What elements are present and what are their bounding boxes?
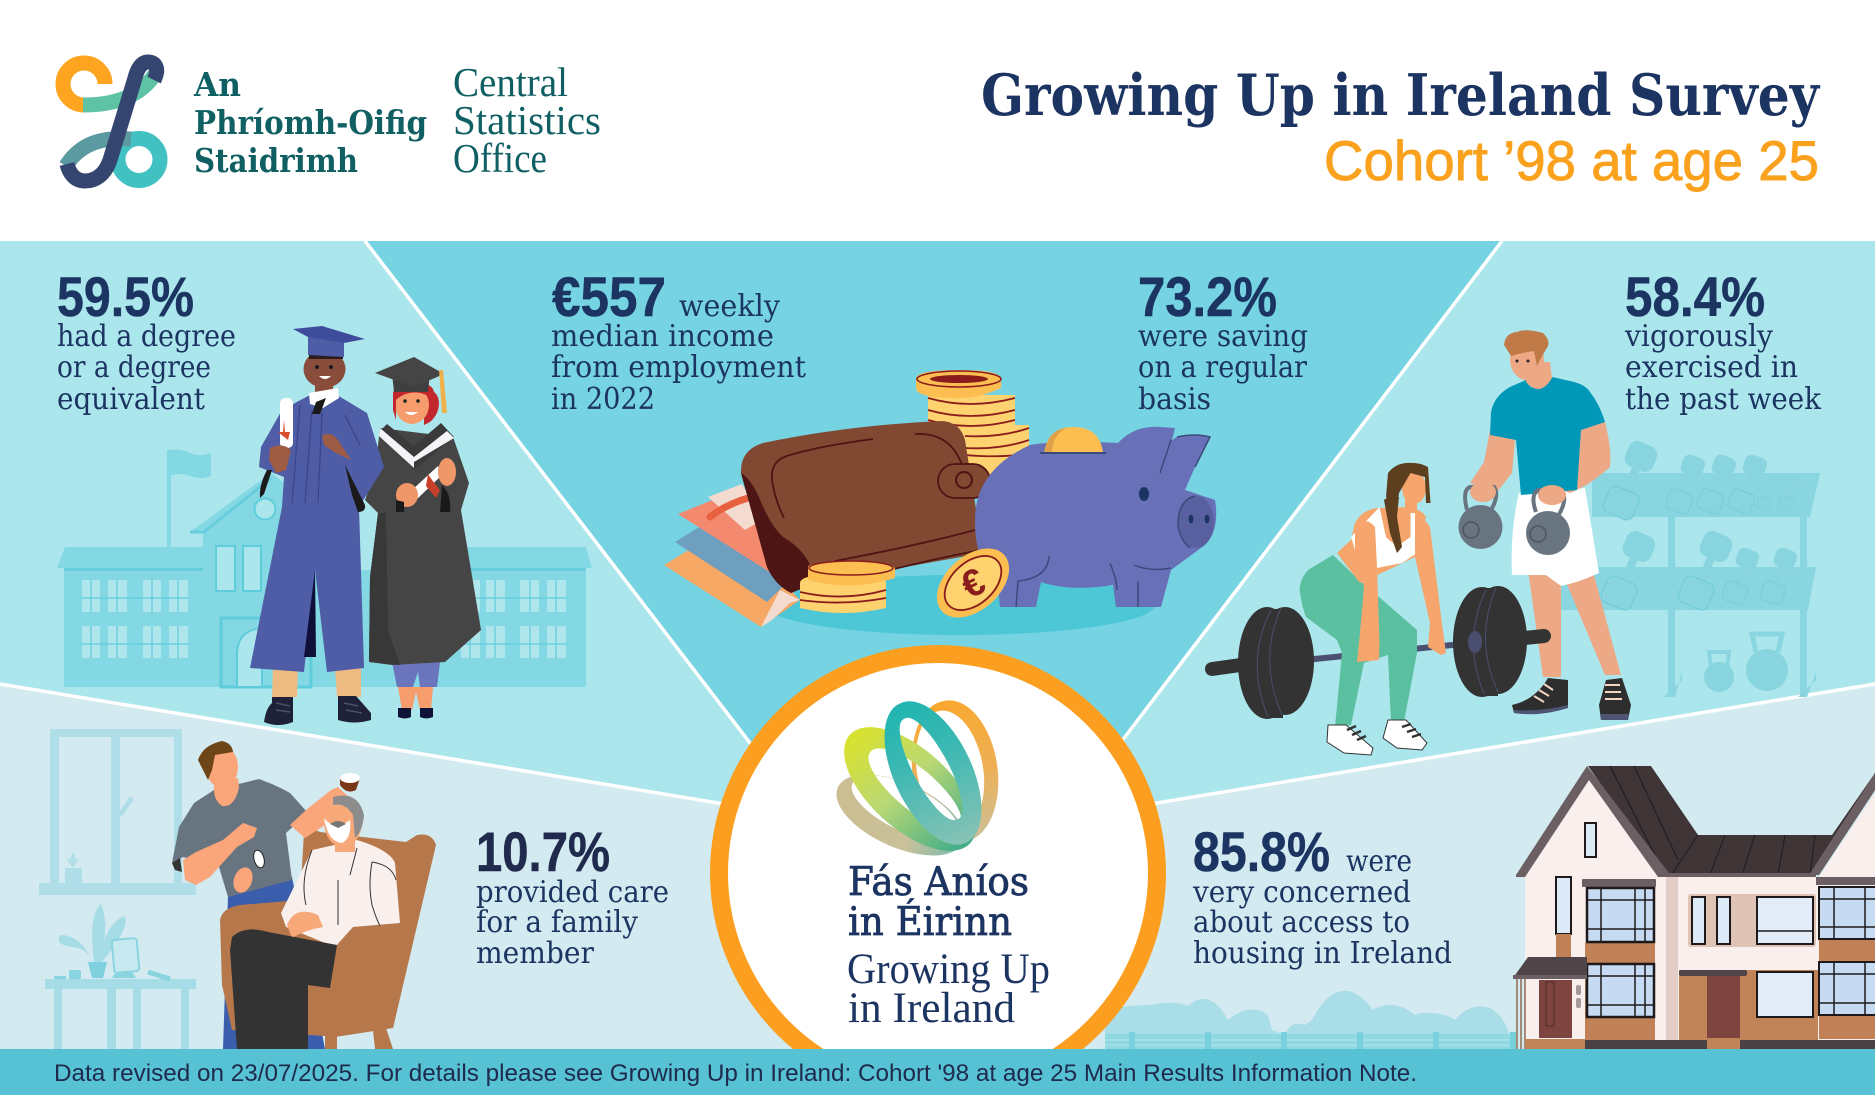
stat: 58.4% exercise bbox=[1624, 265, 1822, 417]
stat: 73.2% saving: basis bbox=[1138, 382, 1211, 417]
house foundation bbox=[1585, 1040, 1875, 1050]
trainer head bbox=[1504, 330, 1552, 389]
stat: 85.8% housing: were bbox=[1346, 844, 1412, 879]
tilted euro coin: € bbox=[955, 560, 992, 607]
shadow bbox=[765, 575, 1155, 635]
stat: 73.2% saving: were saving bbox=[1138, 319, 1308, 354]
man legs and shoes bbox=[264, 668, 371, 725]
house walls bbox=[1525, 780, 1875, 1050]
lifter back bbox=[1337, 507, 1426, 583]
stat: 59.5% degree: had a degree bbox=[57, 319, 236, 354]
stat: €557 income: from employment bbox=[551, 350, 806, 385]
logo text: English name: Office bbox=[453, 135, 547, 181]
house left bay bbox=[1556, 823, 1656, 1040]
trainer legs bbox=[1528, 570, 1621, 677]
logo text: Irish name: Staidrimh bbox=[194, 141, 358, 180]
stat: 58.4% exercise: vigorously bbox=[1624, 319, 1773, 354]
stat: 10.7% care: provided care bbox=[476, 875, 669, 910]
logo text: Irish name: An bbox=[193, 65, 241, 104]
woman mortarboard bbox=[375, 357, 447, 413]
man gown bbox=[250, 395, 384, 672]
lifter arms bbox=[1355, 507, 1446, 662]
man head bbox=[304, 350, 346, 402]
rack kettlebells bbox=[1704, 634, 1788, 692]
logo text: Irish name: Phríomh-Oifig bbox=[194, 103, 427, 142]
trainer arms bbox=[1470, 422, 1610, 493]
woman trousers and legs bbox=[392, 662, 440, 718]
stat: 73.2% saving: on a regular bbox=[1138, 350, 1308, 385]
illustration: son helping father shave bbox=[172, 741, 436, 1049]
lifter leggings bbox=[1300, 555, 1417, 727]
logo text: English name: Central bbox=[453, 59, 568, 105]
stat: 58.4% exercise: the past week bbox=[1625, 382, 1822, 417]
house ground-floor centre bbox=[1679, 970, 1818, 1050]
father hands bbox=[287, 912, 323, 938]
banknotes bbox=[664, 484, 800, 627]
man diploma and hands bbox=[260, 398, 365, 512]
illustration: barbell bbox=[1207, 586, 1550, 719]
subtitle: Cohort ’98 at age 25 bbox=[1324, 129, 1819, 192]
stat: 59.5% degree bbox=[57, 265, 236, 417]
son trousers bbox=[223, 877, 325, 1049]
woman head and hair bbox=[393, 381, 439, 425]
logo text: English name bbox=[453, 59, 601, 181]
stat: €557 income bbox=[551, 265, 806, 417]
icon: Growing Up in Ireland loops bbox=[836, 700, 998, 855]
stat: 58.4% exercise: exercised in bbox=[1625, 350, 1798, 385]
badge text: Fás Aníos bbox=[848, 860, 1029, 905]
woman gown bbox=[365, 428, 481, 665]
armchair bbox=[220, 830, 436, 1049]
wallet bbox=[741, 421, 990, 593]
footer note bbox=[0, 1049, 1875, 1095]
stat: 73.2% saving bbox=[1138, 265, 1308, 417]
illustration: woman graduate bbox=[365, 357, 481, 718]
front coin stack bbox=[800, 561, 895, 613]
son shirt bbox=[172, 779, 308, 897]
logo text: English name: Statistics bbox=[453, 97, 601, 143]
stat: 85.8% housing: about access to bbox=[1193, 905, 1410, 940]
stat: €557 income: €557 bbox=[552, 265, 666, 328]
stat: 59.5% degree: 59.5% bbox=[57, 265, 194, 328]
header background bbox=[0, 0, 1875, 241]
son arms bbox=[172, 787, 352, 885]
logo: Central Statistics Office bbox=[63, 59, 601, 181]
icon: CSO knot mark bbox=[63, 62, 160, 181]
trainer shirt bbox=[1490, 377, 1605, 495]
tilted euro coin bbox=[924, 535, 1022, 631]
stat: 10.7% care: member bbox=[476, 936, 595, 971]
stat: 10.7% care bbox=[476, 820, 669, 971]
panel: central income and savings wedge bbox=[365, 241, 1502, 983]
son head bbox=[198, 741, 239, 806]
panel: lower care and housing band bbox=[0, 684, 1875, 1049]
woman diploma and hands bbox=[396, 458, 456, 512]
badge text: in Éirinn bbox=[848, 898, 1012, 945]
logo text: Irish name bbox=[193, 65, 427, 180]
illustration: man graduate bbox=[250, 326, 384, 725]
father head bbox=[324, 795, 364, 852]
stat: 59.5% degree: or a degree bbox=[57, 350, 211, 385]
badge text bbox=[847, 860, 1050, 1032]
illustration: semi-detached houses bbox=[1513, 766, 1875, 1050]
illustration: female lifter bbox=[1300, 463, 1446, 755]
house right bay bbox=[1816, 877, 1875, 1039]
panel: background light sides bbox=[0, 241, 1875, 1049]
plant and mirror bbox=[54, 904, 170, 979]
man collar and tie bbox=[309, 388, 339, 414]
armchair front arm bbox=[335, 922, 416, 1037]
badge text: Growing Up bbox=[847, 946, 1050, 993]
stat: 85.8% housing: housing in Ireland bbox=[1193, 936, 1452, 971]
illustration: dumbbell rack background bbox=[1561, 438, 1820, 697]
house pillar bbox=[1666, 877, 1678, 1040]
lifter head and hair bbox=[1384, 463, 1430, 553]
illustration: bushes and fence background bbox=[1105, 991, 1516, 1050]
badge: Growing Up in Ireland circle bbox=[719, 654, 1157, 1092]
illustration: school building background bbox=[57, 449, 592, 687]
rack dumbbells bbox=[1599, 438, 1803, 612]
stat: 85.8% housing: 85.8% bbox=[1193, 820, 1330, 883]
stat: 73.2% saving: 73.2% bbox=[1138, 265, 1277, 328]
house first-floor centre windows bbox=[1688, 894, 1816, 947]
illustration: window and side table background bbox=[39, 729, 196, 1049]
house roof bbox=[1516, 766, 1875, 877]
stat: 59.5% degree: equivalent bbox=[57, 382, 205, 417]
window bbox=[39, 729, 196, 895]
illustration: savings scene bbox=[664, 370, 1216, 635]
badge text: in Ireland bbox=[848, 985, 1015, 1032]
man mortarboard bbox=[293, 326, 365, 357]
stat: 85.8% housing bbox=[1192, 820, 1452, 971]
stat: €557 income: median income bbox=[551, 319, 774, 354]
piggy bank bbox=[975, 427, 1216, 607]
woman stole bbox=[379, 423, 454, 470]
trainer shoes bbox=[1512, 678, 1631, 720]
stat: 85.8% housing: very concerned bbox=[1192, 875, 1411, 910]
stat: 10.7% care: for a family bbox=[476, 905, 638, 940]
father shirt bbox=[281, 840, 400, 947]
father trousers bbox=[230, 929, 337, 1049]
footer note: Data revised on 23/07/2025. For details please see Growing Up in Ireland: Cohort '98 at age 25 Main Results Information Note. bbox=[54, 1060, 1417, 1087]
trainer shorts bbox=[1512, 488, 1599, 586]
illustration: male trainer bbox=[1458, 330, 1631, 720]
stat: €557 income: in 2022 bbox=[551, 382, 655, 417]
coin stack behind wallet bbox=[916, 370, 1029, 500]
lifter shoes bbox=[1327, 720, 1427, 755]
table bbox=[45, 979, 196, 1049]
lifter top bbox=[1351, 507, 1417, 568]
stat: 58.4% exercise: 58.4% bbox=[1625, 265, 1765, 328]
house porch bbox=[1513, 957, 1587, 1050]
trainer kettlebells bbox=[1458, 482, 1570, 555]
shaving brush and razor bbox=[230, 773, 360, 895]
stat: €557 income: weekly bbox=[679, 289, 780, 324]
stat: 10.7% care: 10.7% bbox=[476, 820, 610, 883]
